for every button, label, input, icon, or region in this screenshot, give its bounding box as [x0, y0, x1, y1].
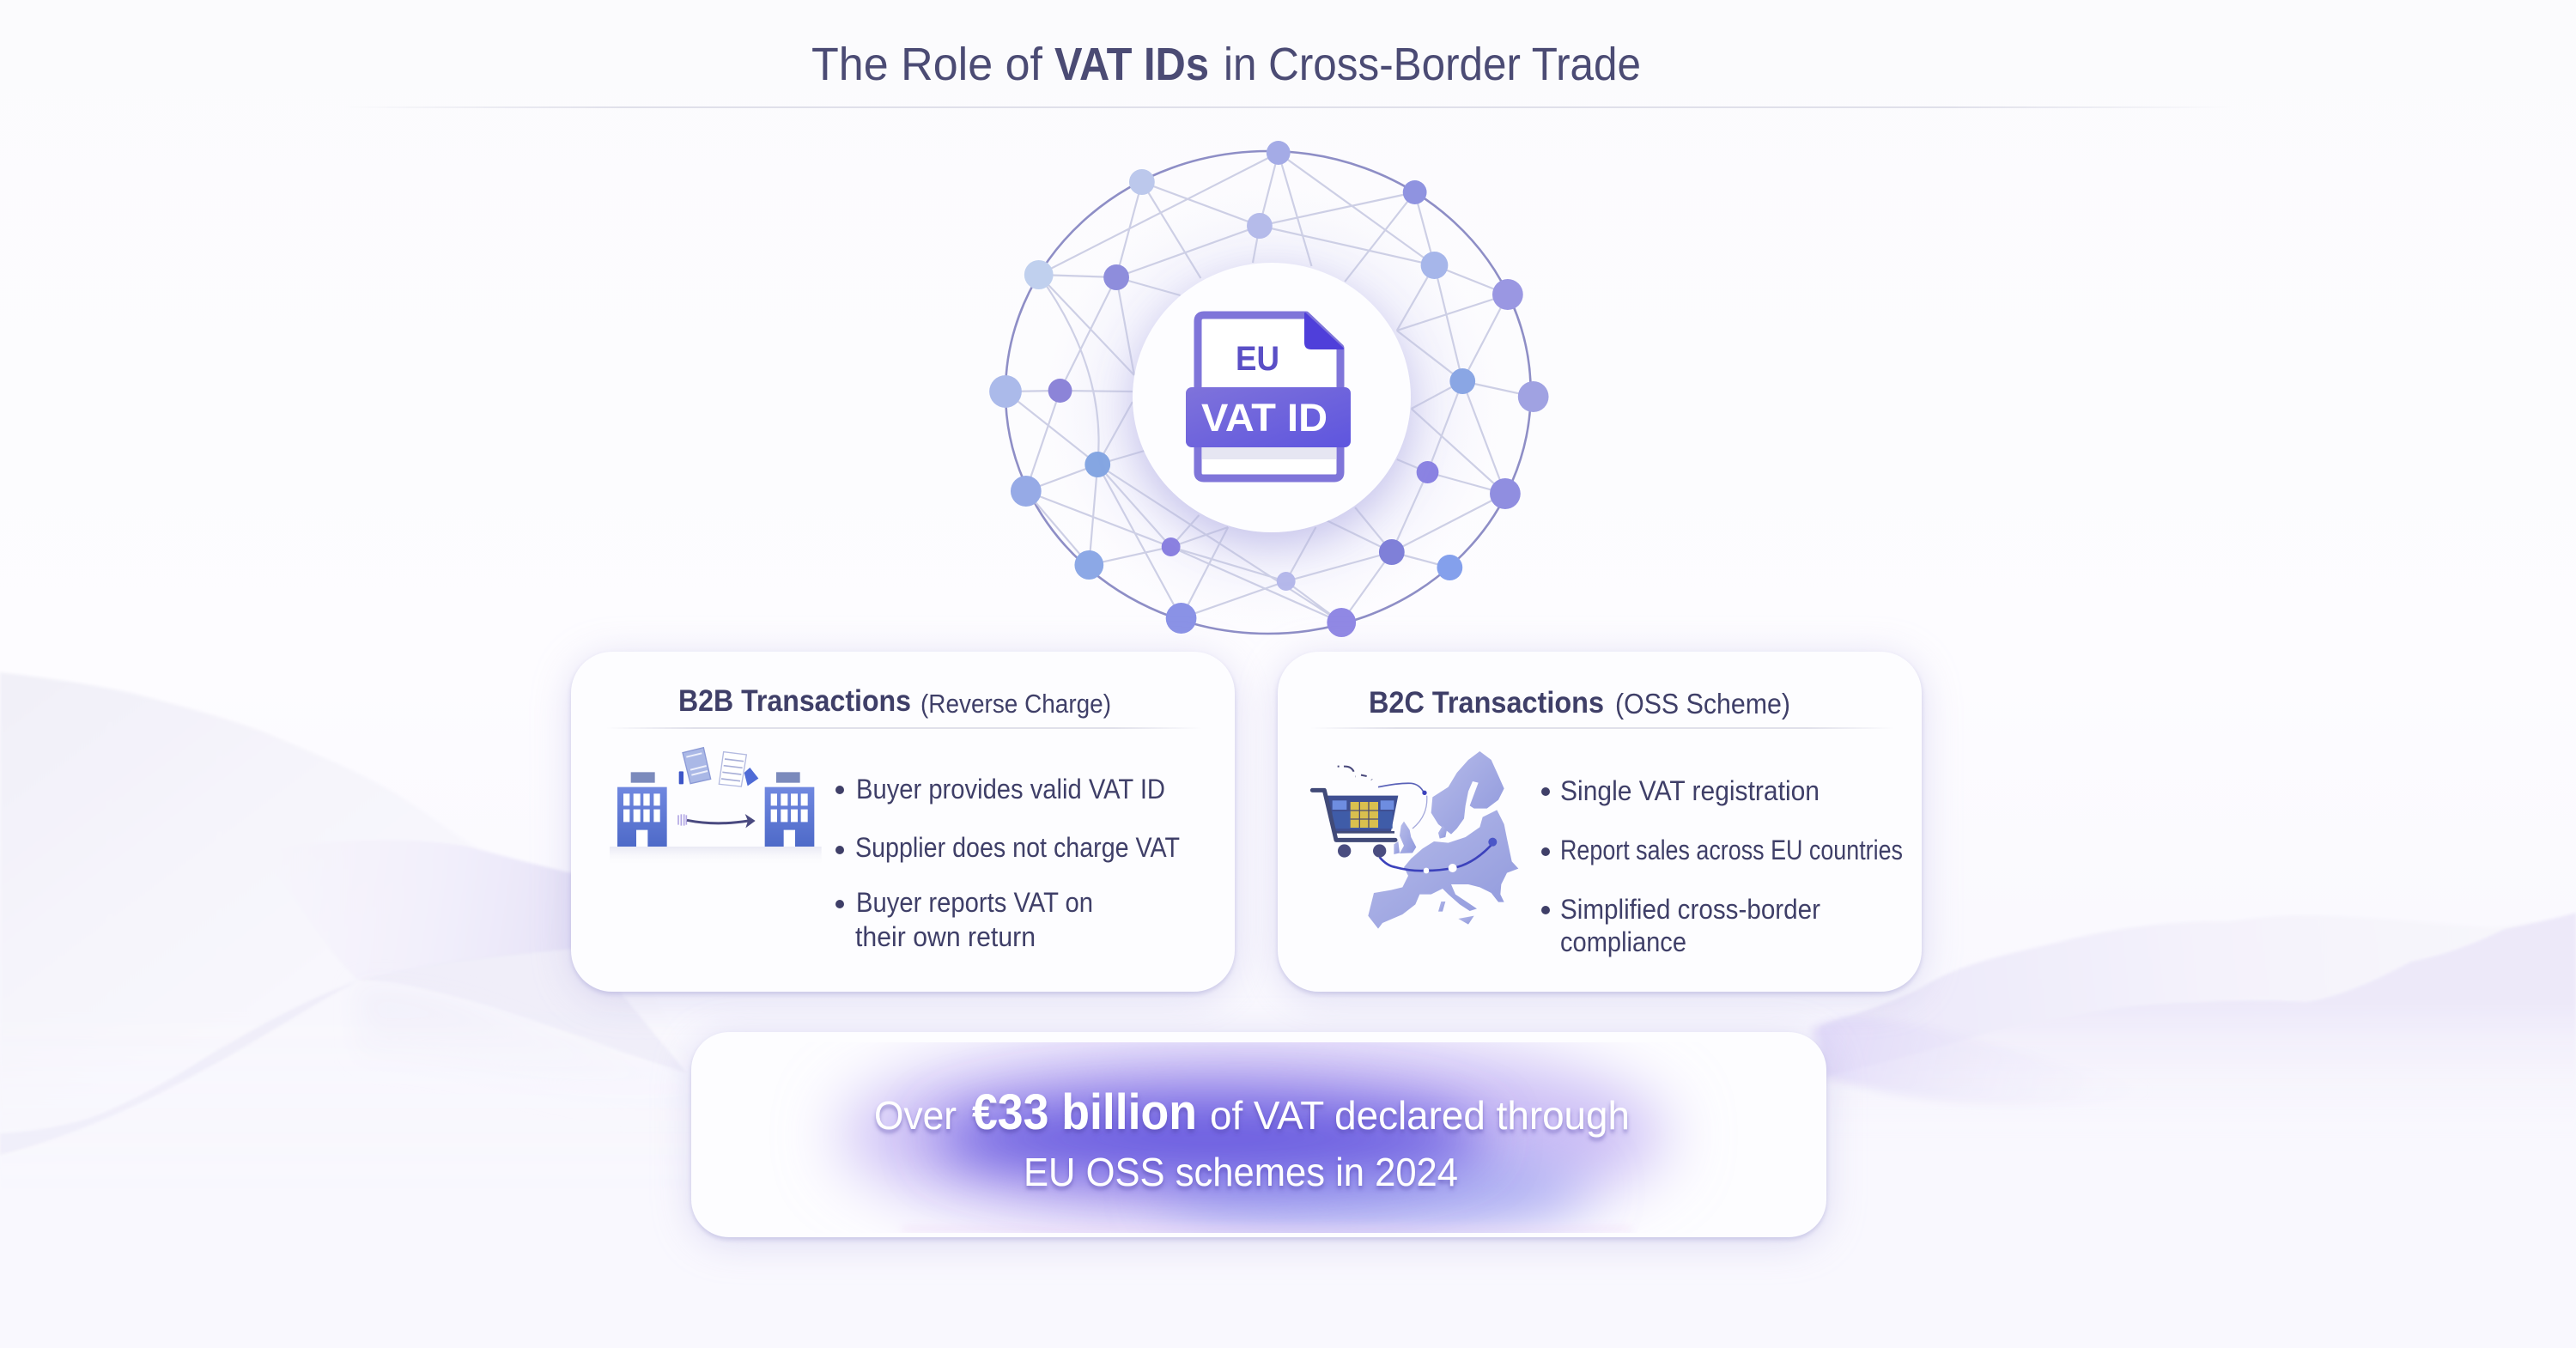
title — [811, 39, 1641, 90]
B2B heading: (Reverse Charge) — [920, 689, 1111, 719]
B2B bullet list: Buyer provides valid VAT ID — [856, 774, 1165, 805]
shopping cart — [1325, 796, 1398, 831]
icon: VAT ID document: EU — [1236, 340, 1279, 378]
title: The Role of — [811, 39, 1043, 90]
icon: shopping cart over map of Europe — [1312, 751, 1518, 929]
B2C heading: (OSS Scheme) — [1615, 688, 1790, 720]
B2C bullet list: compliance — [1560, 926, 1686, 957]
network nodes — [989, 141, 1549, 637]
center circle — [1133, 263, 1411, 532]
B2C bullet list: Simplified cross-border — [1560, 894, 1820, 925]
banner text: EU OSS schemes in 2024 — [1024, 1150, 1458, 1194]
B2C bullet list: Single VAT registration — [1560, 775, 1820, 806]
callout: OSS statistic banner — [691, 1032, 1826, 1237]
B2B bullet list — [835, 774, 1180, 952]
B2C bullet list: Report sales across EU countries — [1560, 835, 1903, 865]
B2C heading: B2C Transactions — [1369, 686, 1604, 720]
B2B bullet list: Supplier does not charge VAT — [855, 832, 1180, 863]
icon: VAT ID document: VAT ID — [1201, 396, 1327, 440]
panel: B2B transactions — [571, 652, 1235, 992]
B2B heading: B2B Transactions — [678, 684, 911, 718]
title: VAT IDs — [1054, 39, 1209, 90]
panel: B2C transactions — [1278, 652, 1922, 992]
network ring — [1005, 151, 1531, 634]
banner text: €33 billion — [972, 1084, 1197, 1140]
banner text: Over — [874, 1093, 957, 1138]
banner text: of VAT declared through — [1210, 1093, 1630, 1138]
B2B bullet list: Buyer reports VAT on — [856, 887, 1093, 918]
banner text — [874, 1084, 1630, 1194]
B2B bullet list: their own return — [855, 921, 1036, 952]
B2C heading — [1369, 686, 1790, 720]
banner purple glow — [841, 1039, 1666, 1231]
background — [0, 149, 2576, 1154]
map of Europe — [1368, 751, 1518, 929]
icon: two buildings exchanging documents — [610, 748, 822, 866]
network connections — [1005, 153, 1534, 622]
title: in Cross-Border Trade — [1224, 39, 1641, 90]
icon: VAT ID document — [1186, 313, 1351, 478]
B2B heading — [678, 684, 1111, 719]
B2C bullet list — [1541, 775, 1903, 957]
network diagram — [989, 141, 1549, 637]
